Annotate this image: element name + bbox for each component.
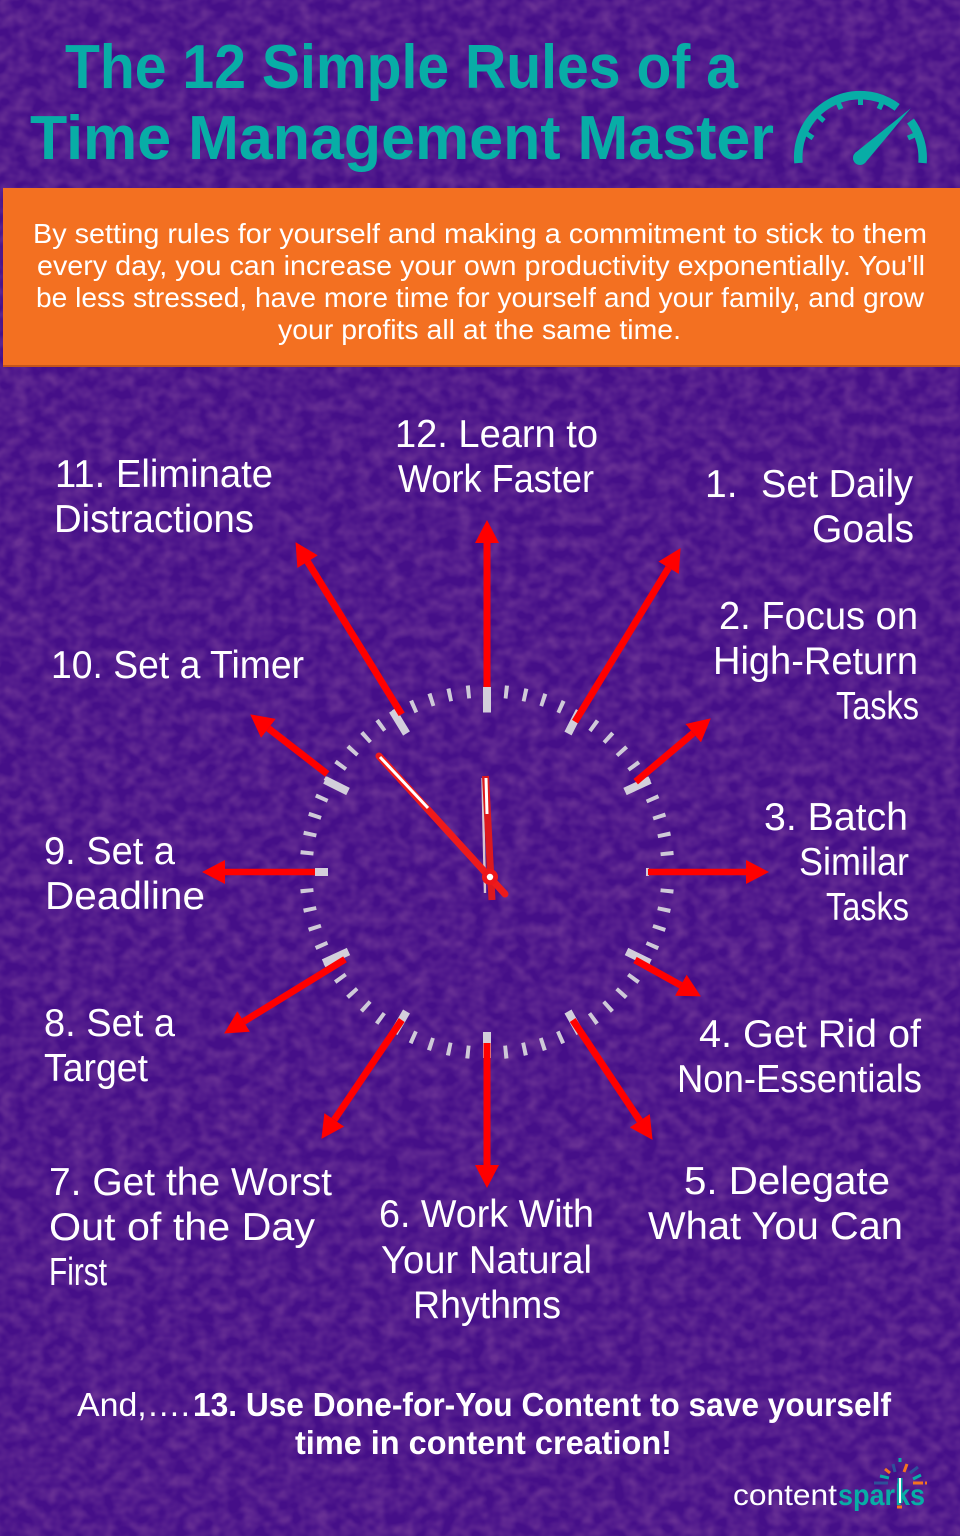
rule 6 label: Rhythms — [413, 1284, 561, 1327]
rule 12 label — [395, 413, 598, 501]
rule 2 label: Tasks — [836, 685, 919, 728]
rule 10 label: 10. Set a Timer — [51, 644, 304, 687]
rule 7 label — [49, 1161, 332, 1294]
rule 11 label — [54, 453, 273, 541]
closing statement: 13. Use Done-for-You Content to save yourself — [193, 1386, 892, 1423]
rule 9 label: Deadline — [45, 875, 205, 918]
panel: intro banner: be less stressed, have more time for yourself and your family, and grow — [36, 282, 925, 313]
panel: intro banner — [3, 188, 960, 367]
rule 3 label: Tasks — [826, 886, 909, 929]
rule 3 label: Similar — [799, 841, 909, 884]
rule 2 label — [713, 595, 919, 728]
title: The 12 Simple Rules of a — [65, 33, 738, 102]
rule 11 label: 11. Eliminate — [55, 453, 273, 496]
logo: contentsparks: content — [733, 1479, 838, 1512]
rule 7 label: 7. Get the Worst — [49, 1161, 332, 1204]
arrow: rule 9 — [225, 869, 315, 875]
closing statement: time in content creation! — [295, 1424, 672, 1461]
rule 5 label: What You Can — [648, 1205, 903, 1248]
closing statement: And,…. — [77, 1386, 190, 1423]
arrow: rule 3 — [648, 869, 746, 875]
rule 3 label: 3. Batch — [764, 796, 908, 839]
rule 4 label — [677, 1013, 922, 1101]
rule 7 label: First — [49, 1251, 107, 1294]
logo: contentsparks: sparks — [838, 1479, 925, 1512]
title: Time Management Master — [30, 104, 774, 173]
rule 9 label — [44, 830, 205, 918]
rule 12 label: Work Faster — [398, 458, 594, 501]
rule 2 label: High-Return — [713, 640, 918, 683]
rule 5 label — [648, 1160, 903, 1248]
arrow: rule 11 — [308, 562, 402, 714]
panel: intro banner: your profits all at the same time. — [278, 314, 681, 345]
panel: intro banner: every day, you can increase your own productivity exponentially. You'll — [37, 250, 925, 281]
rule 11 label: Distractions — [54, 498, 254, 541]
arrow: rule 2 — [636, 733, 693, 782]
rule 5 label: 5. Delegate — [684, 1160, 890, 1203]
panel: intro banner: By setting rules for yourself and making a commitment to stick to them — [33, 218, 927, 249]
rule 9 label: 9. Set a — [44, 830, 175, 873]
arrow: rule 4 — [635, 960, 681, 985]
logo: contentsparks — [733, 1458, 927, 1512]
rule 1 label: Set Daily — [761, 463, 913, 506]
clock hands — [379, 756, 505, 900]
icon: speedometer gauge — [798, 95, 923, 165]
rule 6 label: 6. Work With — [379, 1193, 594, 1236]
rule 6 label: Your Natural — [381, 1239, 592, 1282]
arrow: rule 6 — [484, 1043, 490, 1165]
arrow: rule 7 — [334, 1020, 402, 1120]
rule 1 label — [705, 463, 914, 551]
arrow: rule 1 — [575, 568, 669, 722]
rule 3 label — [764, 796, 909, 929]
rule 2 label: 2. Focus on — [719, 595, 918, 638]
arrow: rule 5 — [573, 1020, 640, 1121]
rule 8 label: 8. Set a — [44, 1002, 175, 1045]
title — [30, 33, 774, 173]
rule 1 label: Goals — [812, 508, 914, 551]
rule 12 label: 12. Learn to — [395, 413, 598, 456]
clock face ticks — [306, 687, 668, 1058]
rule 4 label: Non-Essentials — [677, 1058, 922, 1101]
rule 8 label: Target — [44, 1047, 148, 1090]
closing statement — [77, 1386, 892, 1461]
rule 7 label: Out of the Day — [49, 1206, 316, 1249]
rule 1 label: 1. — [705, 463, 738, 506]
rule 6 label — [379, 1193, 594, 1327]
arrow: rule 10 — [268, 728, 327, 774]
rule 8 label — [44, 1002, 175, 1090]
rule 4 label: 4. Get Rid of — [699, 1013, 921, 1056]
arrow: rule 8 — [244, 959, 345, 1022]
arrow: rule 12 — [484, 543, 490, 687]
